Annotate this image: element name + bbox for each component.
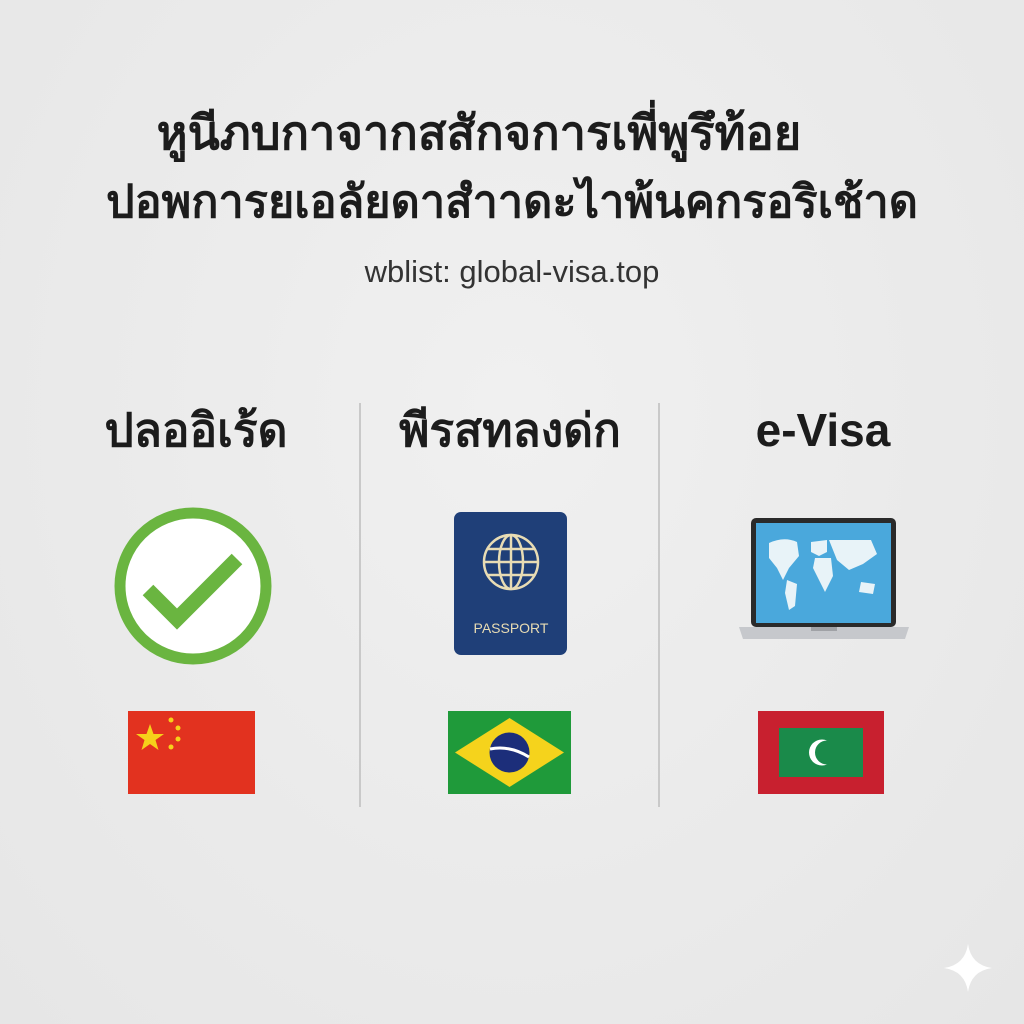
title: หูนีภบกาจากสสักจการเพี่พูรึท้อย — [157, 106, 801, 159]
panel: column 3 — [739, 404, 909, 794]
subtitle: wblist: global-visa.top — [365, 254, 659, 289]
panel: column 1 — [105, 404, 287, 794]
panel: column 2 — [399, 404, 621, 794]
flag: China — [128, 711, 255, 794]
flag: Brazil — [448, 711, 571, 794]
icon: passport — [454, 512, 567, 655]
icon: check circle — [114, 508, 272, 664]
title — [106, 100, 918, 227]
title: ปอพการยเอลัยดาสำาดะไาพ้นคกรอริเช้าด — [106, 176, 918, 227]
flag: Maldives — [758, 711, 884, 794]
heading 2: พีรสทลงด่ก — [399, 404, 621, 456]
heading 3: e-Visa — [756, 404, 890, 456]
heading 1: ปลออิเร้ด — [105, 404, 287, 456]
icon: sparkle — [945, 945, 991, 991]
icon: laptop — [739, 518, 909, 639]
icon: passport: PASSPORT — [474, 620, 549, 636]
